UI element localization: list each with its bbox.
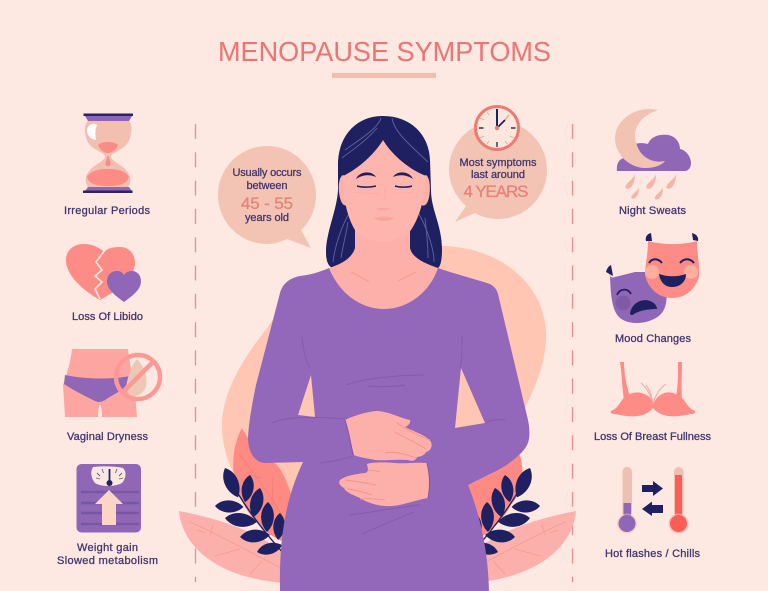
gaps between arms and torso (298, 368, 485, 428)
panel: night sweats (615, 109, 691, 217)
dress (248, 268, 529, 591)
neck and chest (329, 220, 438, 309)
label: Loss Of Breast Fullness (594, 431, 712, 443)
title underline (332, 73, 436, 78)
label: Loss Of Libido (72, 311, 143, 323)
icon: sweat drops (625, 174, 676, 200)
icon: bra (611, 362, 695, 416)
panel: mood changes (606, 233, 699, 345)
label: Irregular Periods (64, 205, 150, 217)
plant: left (179, 428, 310, 583)
icon: cold thermometer (617, 467, 637, 534)
branch (215, 465, 286, 557)
speech bubble: duration (449, 121, 547, 222)
ears (339, 175, 350, 206)
face (343, 140, 426, 241)
title: MENOPAUSE SYMPTOMS (218, 36, 551, 67)
speech bubble: duration: 4 YEARS (464, 182, 528, 201)
speech bubble: onset age (218, 146, 316, 248)
icon: moon (615, 109, 665, 168)
panel: vaginal dryness (63, 349, 160, 443)
panel: irregular periods (64, 114, 150, 217)
back leaf (233, 428, 310, 545)
panel: loss of libido (66, 244, 143, 323)
icon: exchange arrows (642, 481, 663, 516)
lower hand (339, 462, 429, 506)
label: Vaginal Dryness (67, 431, 148, 443)
plant: right (435, 455, 576, 583)
upper hand (345, 411, 432, 461)
speech bubble: onset age: between (246, 180, 288, 192)
speech bubble: duration: Most symptoms (460, 157, 537, 169)
speech bubble: onset age: years old (245, 212, 289, 224)
icon: hourglass (83, 114, 133, 193)
panel: hot flashes (605, 467, 700, 560)
icon: clock (476, 106, 518, 150)
woman figure (248, 116, 529, 591)
panel: breast fullness (594, 362, 712, 443)
icon: hot thermometer (668, 467, 688, 534)
speech bubble: onset age: 45 - 55 (241, 194, 293, 213)
icon: scale (76, 464, 141, 532)
dress folds (272, 337, 505, 534)
speech bubble: onset age: Usually occurs (232, 167, 302, 179)
eyebrows (356, 172, 413, 179)
nose and mouth (374, 208, 394, 221)
icon: no dryness (63, 349, 160, 417)
label: Weight gain (77, 542, 138, 554)
background blob (222, 246, 546, 535)
panel: weight gain (57, 464, 158, 567)
icon: happy mask (645, 233, 699, 298)
label: Night Sweats (619, 205, 686, 217)
pink leaf (179, 511, 300, 583)
label: Hot flashes / Chills (605, 548, 700, 560)
label: Slowed metabolism (57, 555, 158, 567)
icon: broken heart (66, 244, 141, 302)
icon: cloud (617, 135, 691, 171)
speech bubble: duration: last around (471, 169, 525, 181)
icon: sad mask (606, 265, 667, 323)
hair strands (333, 118, 434, 262)
hair (326, 116, 442, 268)
label: Mood Changes (615, 333, 692, 345)
closed eyes (357, 186, 412, 187)
